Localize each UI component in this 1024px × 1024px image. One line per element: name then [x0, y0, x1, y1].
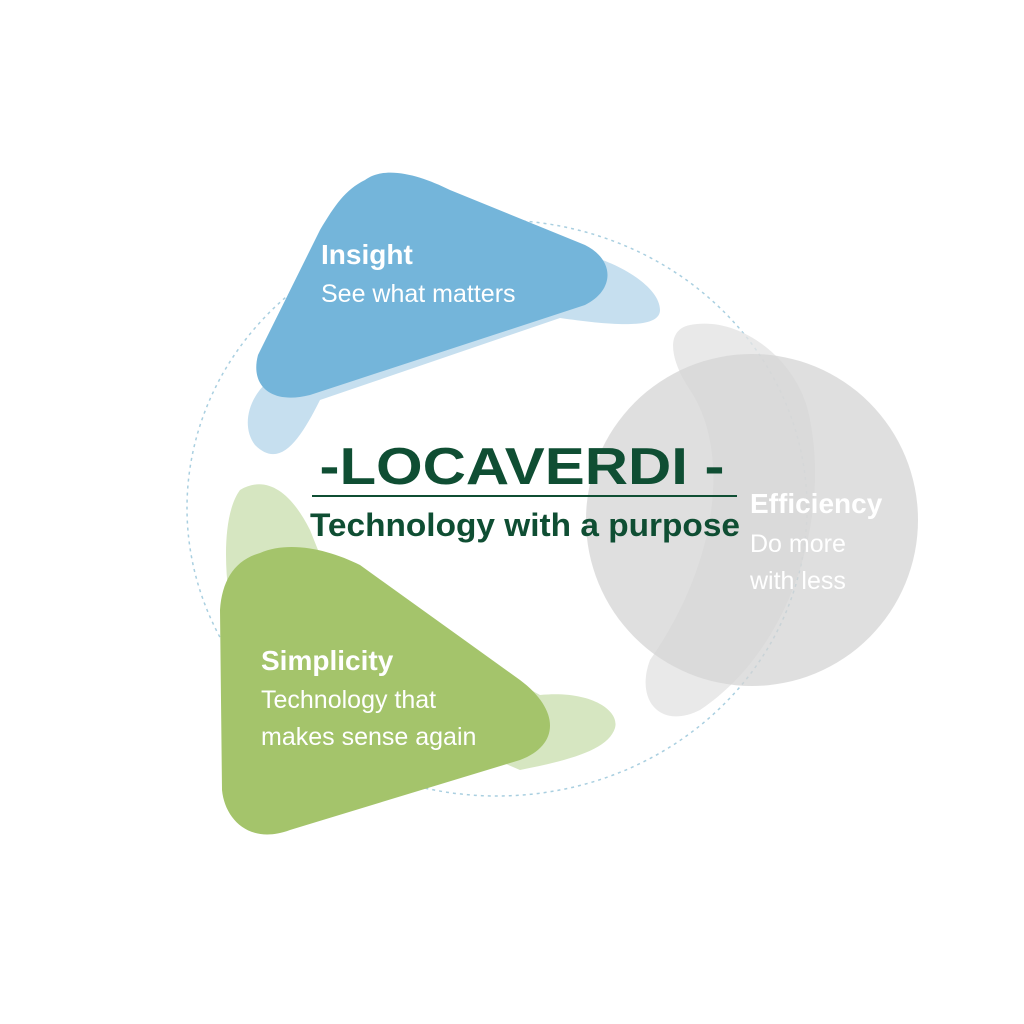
simplicity heading: Simplicity [261, 645, 394, 676]
blue main shape [256, 173, 608, 398]
grey crescent background [646, 324, 815, 716]
subtitle: Technology with a purpose [310, 507, 740, 543]
grey circle [586, 354, 918, 686]
efficiency heading: Efficiency [750, 488, 883, 519]
light blue shadow shape [248, 250, 660, 454]
title: -LOCAVERDI - [320, 438, 724, 496]
insight heading: Insight [321, 239, 413, 270]
panel: simplicity: makes sense again [261, 723, 476, 751]
panel: simplicity [220, 484, 616, 834]
panel: efficiency: with less [749, 567, 846, 595]
light green shadow shape [226, 484, 616, 770]
simplicity text: Technology that [261, 686, 436, 714]
panel: insight [248, 173, 660, 454]
panel: efficiency [586, 324, 918, 716]
dashed orbit circle [187, 220, 807, 796]
insight text: See what matters [321, 280, 516, 308]
green main shape [220, 547, 550, 834]
efficiency text: Do more [750, 530, 846, 558]
